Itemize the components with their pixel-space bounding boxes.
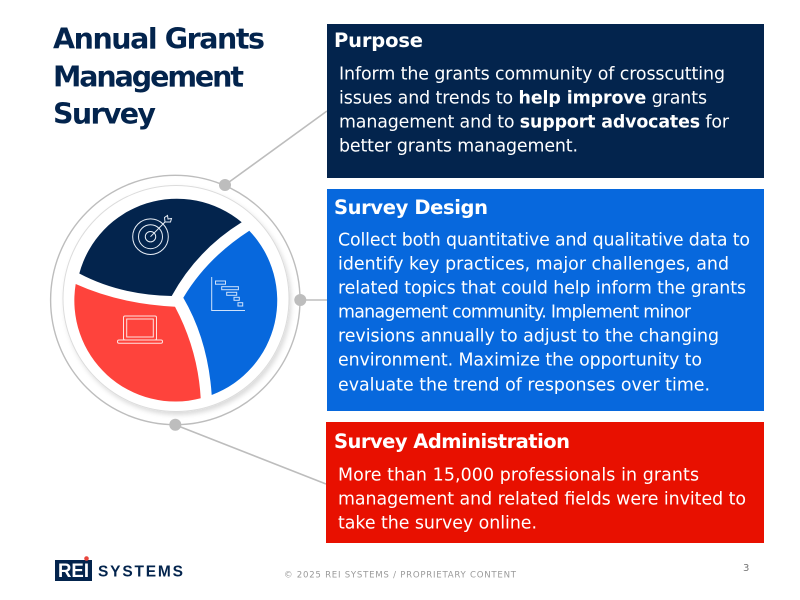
text: survey administration body: take the survey online. (338, 514, 537, 534)
text: survey design body: revisions annually to adjust to the changing (338, 326, 719, 346)
text: purpose body (339, 64, 730, 156)
panel: purpose (327, 24, 764, 178)
text: survey design body (338, 230, 750, 396)
panel: survey administration (326, 422, 764, 543)
title: Annual Grants (53, 22, 265, 56)
logo: REI Systems (55, 556, 183, 582)
circular diagram (51, 175, 300, 425)
text: survey administration body: More than 15,000 professionals in grants (338, 466, 699, 486)
title (53, 22, 265, 130)
title: Management (53, 60, 244, 94)
connector: bottom dot to Survey Administration panel (169, 419, 326, 484)
panel: survey design (327, 189, 764, 411)
page number: 3 (743, 563, 749, 574)
icon: target with arrow (133, 216, 172, 254)
text: survey design body: management community. Implement minor (338, 302, 692, 322)
segment: navy purpose (79, 199, 242, 296)
text: purpose body: management and to support advocates for (339, 112, 730, 132)
footer copyright: © 2025 REI SYSTEMS / PROPRIETARY CONTENT (284, 570, 517, 580)
text: survey design body: identify key practices, major challenges, and (338, 254, 729, 274)
text: survey administration body: management and related fields were invited to (338, 490, 746, 510)
text: survey design body: evaluate the trend of responses over time. (338, 376, 710, 396)
text: survey design body: environment. Maximize the opportunity to (338, 350, 702, 370)
segment: red administration (74, 284, 201, 402)
logo: REI Systems: REI (58, 561, 89, 582)
heading: purpose: Purpose (334, 29, 423, 52)
text: survey administration body (338, 466, 746, 534)
logo: REI Systems: SYSTEMS (98, 564, 183, 580)
text: purpose body: issues and trends to help improve grants (339, 88, 707, 108)
title: Survey (53, 98, 156, 130)
heading: survey design: Survey Design (334, 196, 488, 219)
icon: gantt chart (212, 277, 245, 310)
connector: right dot to Survey Design panel (294, 294, 327, 306)
connector: top dot to Purpose panel (219, 111, 327, 191)
text: survey design body: related topics that could help inform the grants (338, 278, 746, 298)
icon: laptop (118, 316, 162, 343)
segment: blue design (183, 231, 277, 395)
text: purpose body: Inform the grants community of crosscutting (339, 64, 725, 84)
text: purpose body: better grants management. (339, 136, 578, 156)
text: survey design body: Collect both quantitative and qualitative data to (338, 230, 750, 250)
heading: survey administration: Survey Administration (334, 430, 570, 453)
